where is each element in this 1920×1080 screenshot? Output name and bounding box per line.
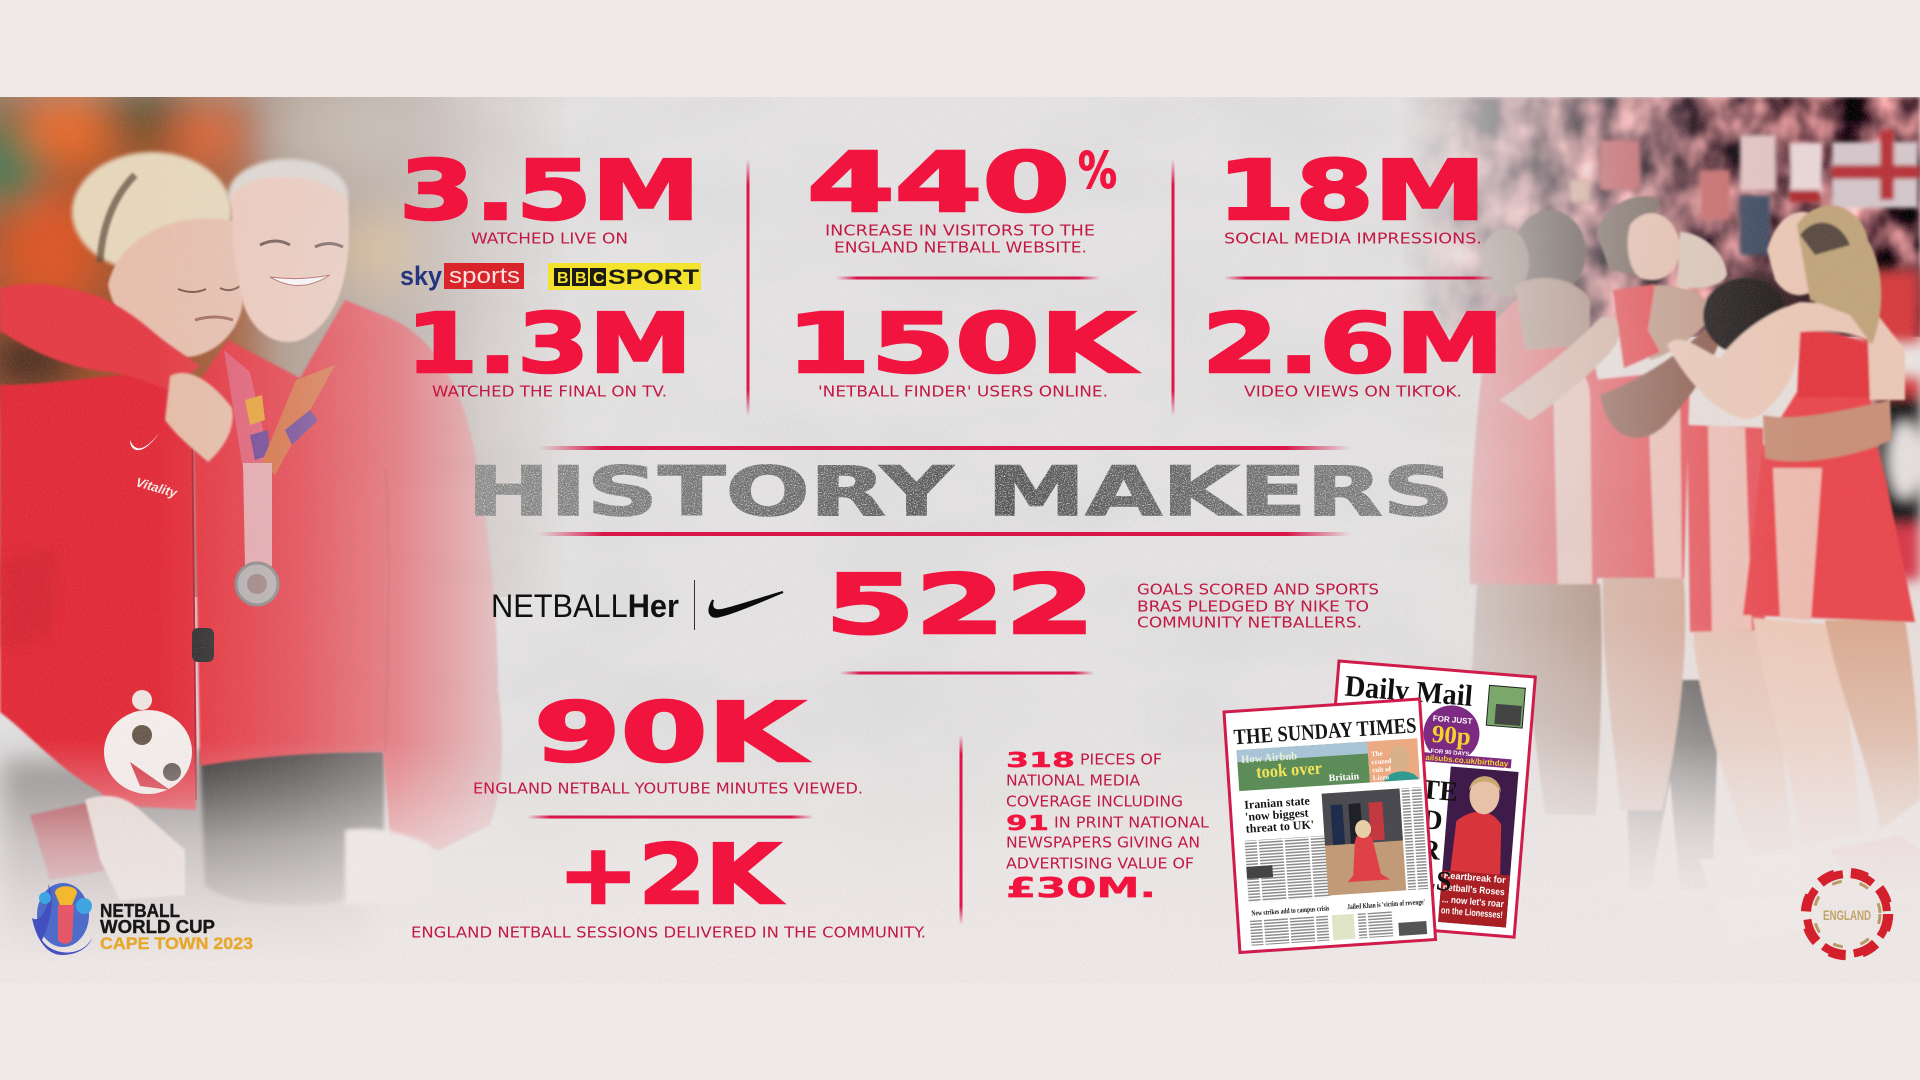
stat: 522 goals and bras: GOALS SCORED AND SPORTS <box>1137 580 1379 598</box>
newspaper: The Sunday Times: New strikes add to campus crisis <box>1251 903 1330 918</box>
stat: +2K sessions: ENGLAND NETBALL SESSIONS DELIVERED IN THE COMMUNITY. <box>411 924 926 942</box>
newspaper: Daily Mail: mailsubs.co.uk/birthday <box>1418 752 1509 769</box>
text block: national media coverage: IN PRINT NATIONAL <box>1054 814 1210 832</box>
newspaper: Daily Mail: netball's Roses <box>1442 882 1505 898</box>
text block: national media coverage: NATIONAL MEDIA <box>1006 772 1141 790</box>
stat: +2K sessions: +2K <box>558 828 784 923</box>
newspaper: Daily Mail: ... now let's roar <box>1441 894 1504 910</box>
newspaper: Daily Mail: LS <box>1416 864 1453 898</box>
stat: 522 goals and bras: COMMUNITY NETBALLERS. <box>1137 614 1362 632</box>
mascot <box>104 690 192 794</box>
logo: Netball World Cup Cape Town 2023: NETBALL <box>100 901 180 921</box>
logos: Sky Sports and BBC Sport: B <box>557 270 569 287</box>
logo: Netball World Cup Cape Town 2023: WORLD CUP <box>100 917 215 937</box>
newspaper: Daily Mail: 90p <box>1431 721 1472 751</box>
lower hands and cuff <box>30 800 110 880</box>
leg fade <box>1380 620 1920 900</box>
stat: 1.3M watched the final: WATCHED THE FINAL ON TV. <box>432 382 667 400</box>
text block: national media coverage: NEWSPAPERS GIVING AN <box>1006 834 1200 852</box>
newspaper: The Sunday Times <box>1224 699 1436 952</box>
shoes <box>1830 836 1920 895</box>
stat: 440% increase <box>807 136 1117 256</box>
newspaper: Daily Mail: Heartbreak for <box>1443 870 1506 886</box>
newspaper: Daily Mail: TE <box>1420 774 1459 808</box>
photo: England team celebrating <box>1411 97 1920 860</box>
jacket logos <box>130 432 180 501</box>
newspaper: The Sunday Times: How Airbnb <box>1241 750 1297 766</box>
stat: 522 goals and bras <box>825 558 1379 653</box>
icon: world cup emblem <box>32 883 92 955</box>
text block: national media coverage: 318 <box>1006 748 1075 772</box>
logos: NetballHer and Nike <box>491 580 783 630</box>
stat: 522 goals and bras: BRAS PLEDGED BY NIKE TO <box>1137 598 1369 616</box>
logos: Sky Sports and BBC Sport: B <box>575 270 587 287</box>
logo: Netball World Cup Cape Town 2023 <box>32 883 253 955</box>
stat: 522 goals and bras: 522 <box>825 558 1095 653</box>
stat: 440% increase: 440 <box>807 136 1070 231</box>
bottom fade <box>0 740 1920 985</box>
left woman head <box>72 152 232 272</box>
stat: 2.6M TikTok views: VIDEO VIEWS ON TIKTOK. <box>1244 382 1462 400</box>
right figure <box>1753 618 1862 845</box>
text block: national media coverage: COVERAGE INCLUDING <box>1006 792 1183 810</box>
text block: national media coverage: £30M. <box>1006 871 1156 904</box>
newspaper: The Sunday Times: Jailed Khan is 'victim of revenge' <box>1347 897 1425 911</box>
newspaper: The Sunday Times: Lizzo <box>1372 773 1390 782</box>
logo: Netball World Cup Cape Town 2023: CAPE TOWN 2023 <box>100 934 253 953</box>
logo: England emblem <box>1802 869 1892 959</box>
newspaper: Daily Mail: R <box>1419 834 1442 867</box>
logos: Sky Sports and BBC Sport: C <box>593 270 605 287</box>
stat: 150K netball finder: 'NETBALL FINDER' USERS ONLINE. <box>818 382 1108 400</box>
newspaper: Daily Mail: D <box>1421 804 1444 837</box>
right woman body <box>193 300 502 850</box>
text block: national media coverage <box>1006 748 1210 904</box>
stat: 1.3M watched the final: 1.3M <box>406 297 692 392</box>
stat: 440% increase: ENGLAND NETBALL WEBSITE. <box>834 238 1087 256</box>
newspaper: The Sunday Times: took over <box>1255 758 1323 782</box>
logo: England emblem: ENGLAND <box>1823 907 1871 923</box>
newspaper: The Sunday Times: Iranian state <box>1244 793 1311 812</box>
title: HISTORY MAKERS <box>467 453 1454 532</box>
stat: 18M social impressions: 18M <box>1217 144 1486 239</box>
stat: 90K YouTube minutes <box>473 686 863 798</box>
newspaper: The Sunday Times: THE SUNDAY TIMES <box>1233 712 1417 749</box>
newspaper: Daily Mail: FOR JUST <box>1432 714 1473 726</box>
newspaper: Daily Mail: on the Lionesses! <box>1441 905 1503 921</box>
logos: Sky Sports and BBC Sport: SPORT <box>608 266 699 289</box>
text block: national media coverage: PIECES OF <box>1080 750 1162 768</box>
newspaper: The Sunday Times: crazed <box>1371 757 1392 766</box>
stat: 18M social impressions <box>1217 144 1486 248</box>
stat: 2.6M TikTok views <box>1202 297 1504 400</box>
logos: Sky Sports and BBC Sport <box>400 261 701 291</box>
stat: 150K netball finder: 150K <box>786 297 1139 392</box>
trousers <box>200 750 385 905</box>
text block: national media coverage: 91 <box>1006 811 1049 835</box>
newspaper: The Sunday Times: 'now biggest <box>1245 806 1309 824</box>
stat: 2.6M TikTok views: 2.6M <box>1202 297 1504 392</box>
stat: 150K netball finder <box>786 297 1139 400</box>
newspaper: The Sunday Times: cult of <box>1372 765 1392 774</box>
arm around shoulder <box>0 284 200 390</box>
photo: two England players embracing <box>0 97 537 932</box>
newspaper: The Sunday Times: The <box>1371 750 1383 758</box>
left woman body <box>0 372 196 810</box>
stat: 3.5M watched live: 3.5M <box>399 144 700 239</box>
logos: Sky Sports and BBC Sport: sky <box>400 261 442 291</box>
heads <box>1677 232 1727 288</box>
logos: Sky Sports and BBC Sport: sports <box>449 263 520 288</box>
stat: 3.5M watched live: WATCHED LIVE ON <box>471 230 628 248</box>
newspaper: Daily Mail: Daily Mail <box>1344 670 1474 713</box>
hand <box>165 373 233 462</box>
stat: 90K YouTube minutes: 90K <box>534 686 809 781</box>
stat: 440% increase: INCREASE IN VISITORS TO THE <box>825 222 1095 240</box>
right woman head <box>226 157 350 210</box>
ribbon and medal <box>224 350 264 470</box>
text block: national media coverage: ADVERTISING VALUE OF <box>1006 854 1194 872</box>
middle figure legs and dresses <box>1603 572 1685 810</box>
jacket logos: Vitality <box>134 474 180 501</box>
watch strap <box>192 628 214 662</box>
stat: 3.5M watched live <box>399 144 700 248</box>
stat: +2K sessions <box>411 828 926 942</box>
newspaper: The Sunday Times: Britain <box>1328 771 1360 784</box>
newspaper: The Sunday Times: threat to UK' <box>1245 817 1315 836</box>
coach legs <box>1627 678 1718 867</box>
stat: 440% increase: % <box>1078 142 1117 200</box>
stat: 18M social impressions: SOCIAL MEDIA IMPRESSIONS. <box>1224 230 1482 248</box>
stat: 90K YouTube minutes: ENGLAND NETBALL YOUTUBE MINUTES VIEWED. <box>473 780 863 798</box>
far left figure <box>1470 584 1602 815</box>
newspaper: Daily Mail <box>1318 661 1535 937</box>
newspaper: Daily Mail: FOR 90 DAYS <box>1430 749 1469 758</box>
logos: NetballHer and Nike: NETBALLHer <box>491 588 679 624</box>
